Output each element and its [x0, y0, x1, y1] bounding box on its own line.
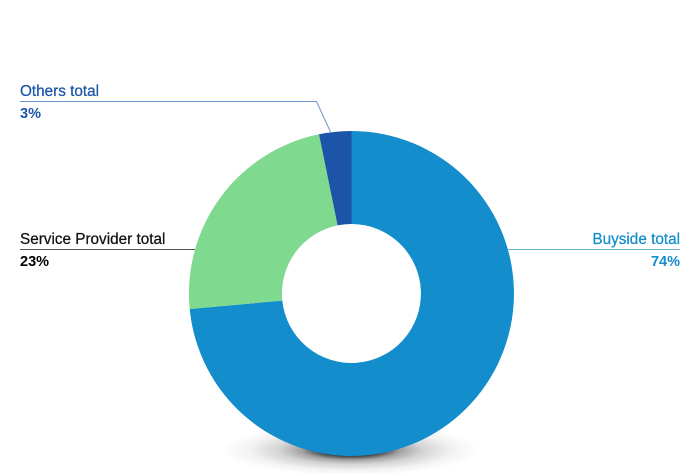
- segment: Buyside total: [190, 131, 514, 456]
- leader line: Service Provider: [20, 248, 195, 250]
- label: Service Provider total: Service Provider total: [20, 231, 165, 248]
- value: Buyside 74%: 74%: [651, 254, 680, 270]
- drop shadow under donut: [221, 424, 481, 474]
- segment: Service Provider total: [189, 134, 338, 309]
- label: Buyside total: Buyside total: [592, 231, 680, 248]
- donut chart: [189, 131, 514, 456]
- value: Others 3%: 3%: [20, 106, 41, 122]
- value: Service Provider 23%: 23%: [20, 254, 49, 270]
- leader line: Buyside: [508, 248, 680, 250]
- leader line: Others: [20, 102, 330, 132]
- segment: Others total: [319, 131, 352, 225]
- label: Others total: Others total: [20, 83, 99, 100]
